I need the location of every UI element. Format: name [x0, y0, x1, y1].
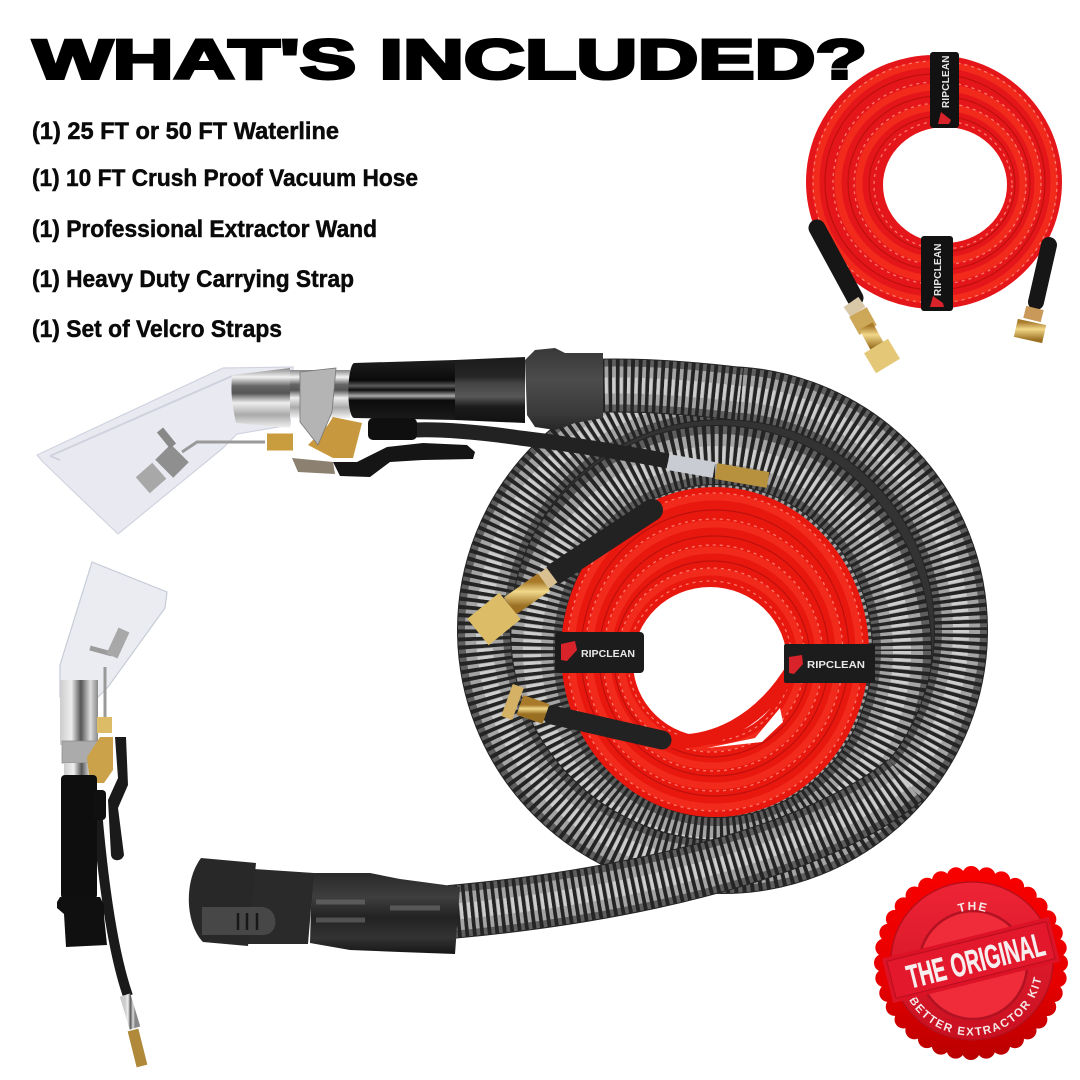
hose ferrule and brass fitting	[125, 995, 142, 1066]
bottom velcro strap	[921, 236, 953, 311]
hose sleeve	[93, 790, 106, 820]
flange and base	[57, 897, 107, 947]
bracket	[292, 458, 335, 474]
included items list	[32, 118, 418, 343]
badge: The Original	[874, 866, 1068, 1060]
water tube and nozzle	[90, 630, 124, 725]
top velcro strap: RIPCLEAN	[941, 55, 952, 108]
lower tube	[64, 763, 96, 776]
horizontal extractor wand	[37, 348, 768, 534]
water tube and nozzle	[144, 430, 293, 486]
bottom velcro strap: RIPCLEAN	[933, 243, 944, 296]
black water hose	[415, 430, 668, 461]
inner coil loop	[532, 455, 902, 847]
curved text: THE: THE	[957, 902, 987, 912]
brass valve	[308, 417, 362, 458]
hole clear of hose	[630, 584, 790, 740]
left velcro strap: RIPCLEAN	[581, 649, 635, 660]
dark backing between coils	[507, 417, 937, 847]
right velcro strap: RIPCLEAN	[807, 660, 865, 671]
included items list: (1) Heavy Duty Carrying Strap	[32, 266, 354, 293]
inner hose loop	[667, 665, 795, 741]
curved text: Better Extractor Kit: BETTER EXTRACTOR KIT	[909, 976, 1041, 1036]
clamp	[62, 741, 105, 763]
chrome tube	[231, 368, 290, 428]
coil body	[806, 55, 1062, 309]
transparent shroud	[37, 367, 293, 534]
black handle	[348, 360, 455, 420]
hose sleeve	[368, 418, 417, 440]
brass valve	[87, 737, 113, 783]
sliver of white under loop	[707, 708, 783, 748]
left velcro strap	[555, 632, 644, 673]
raised ring	[891, 882, 1053, 1040]
filler ribs behind waterline coil	[548, 474, 884, 830]
tube behind clamp	[290, 370, 350, 418]
vacuum hose	[450, 385, 961, 912]
top velcro strap	[930, 52, 959, 128]
hose run to cuff at wand	[590, 385, 740, 394]
outer coil loop	[484, 393, 961, 867]
title: WHAT'S INCLUDED?	[33, 28, 867, 90]
right velcro strap	[784, 644, 875, 683]
right end sleeve and brass coupler	[1028, 245, 1049, 340]
included items list: (1) 10 FT Crush Proof Vacuum Hose	[32, 165, 418, 192]
red waterline coil	[478, 487, 875, 817]
black handle	[61, 775, 97, 899]
coil body	[561, 487, 869, 817]
upper end sleeve and brass coupler	[478, 510, 652, 632]
black water hose	[97, 810, 128, 996]
vertical extractor wand	[57, 562, 167, 1066]
inner disc	[919, 911, 1027, 1019]
included items list: (1) 25 FT or 50 FT Waterline	[32, 118, 339, 145]
chrome tube	[60, 680, 98, 745]
trigger lever	[108, 737, 128, 860]
transparent shroud	[60, 562, 167, 697]
left end sleeve and brass coupler	[817, 228, 888, 366]
included items list: (1) Professional Extractor Wand	[32, 216, 377, 243]
scalloped seal	[883, 875, 1059, 1051]
trigger lever	[333, 443, 475, 477]
bottom vacuum cuff	[189, 858, 460, 954]
clamp	[300, 368, 336, 445]
hose tail to bottom cuff	[450, 780, 905, 912]
gray cuff	[525, 348, 603, 430]
grip section	[455, 357, 525, 423]
waterline coil photo, top right	[806, 52, 1062, 366]
ribbon	[882, 917, 1060, 1003]
included items list: (1) Set of Velcro Straps	[32, 316, 282, 343]
hose ferrule and brass fitting	[668, 462, 768, 480]
shroud rim line	[50, 376, 232, 460]
lower end sleeve and brass coupler	[507, 700, 662, 740]
